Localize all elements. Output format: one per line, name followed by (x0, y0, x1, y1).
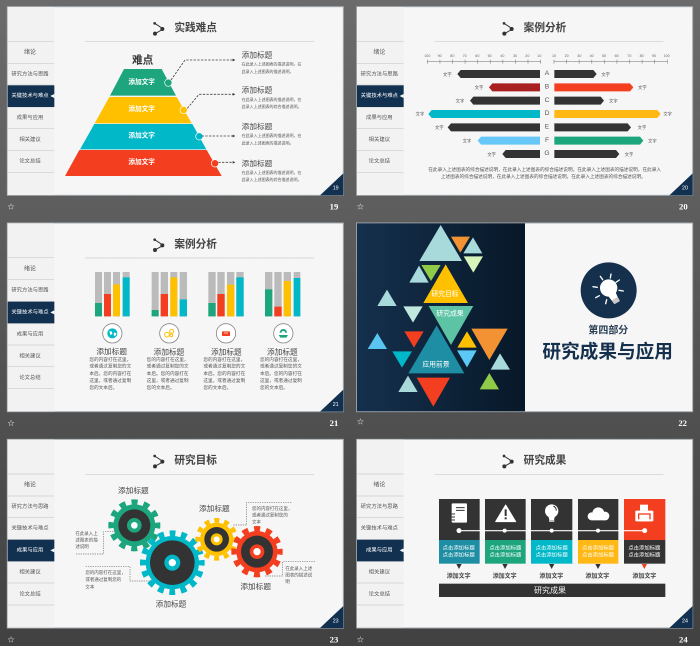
pyramid descriptions: 添加标题 (242, 49, 273, 59)
page number 22: 22 (678, 418, 687, 428)
icon: light bulb (581, 262, 637, 318)
pyramid descriptions: 在此录入上述图表的描述说明，在 (242, 169, 301, 175)
gear captions: 文本 (252, 518, 261, 525)
triangle mosaic: 研究目标 (431, 289, 459, 298)
slide 19: difficulties pyramid (7, 7, 343, 213)
slide frame and navigation 23: 论文总结 (19, 589, 41, 597)
slide frame and navigation 21: 论文总结 (19, 373, 41, 381)
results columns: 点击添加标题 (443, 550, 475, 558)
section title: 研究成果与应用 (542, 341, 673, 362)
chart description: 在此录入上述图表的综合描述说明，在此录入上述图表的综合描述说明。在此录入上述图表的描述说明，在此录入 (428, 166, 661, 173)
gear captions: 明 (285, 579, 290, 585)
slide frame and navigation 19: 绪论 (24, 48, 36, 56)
triangle mosaic: 应用前景 (422, 359, 450, 368)
slide frame and navigation 19: 关键技术与难点 (11, 91, 49, 99)
slide frame and navigation 24: 论文总结 (369, 589, 391, 597)
gear captions: 述说明 (75, 543, 89, 550)
slide frame and navigation 23: 研究目标 (174, 454, 217, 467)
pyramid chart: 添加文字 (128, 77, 155, 86)
butterfly bars: 文字 (638, 84, 647, 91)
gear captions: 在此录入上述 (285, 565, 313, 572)
gear captions: 添加标题 (240, 581, 271, 591)
slide frame and navigation 24: 24 (682, 618, 688, 624)
slide frame and navigation 24: 研究方法与思路 (361, 502, 399, 510)
gear captions: 在此录入上 (75, 530, 98, 537)
column captions: 您的内容打在这里， (89, 356, 131, 363)
slide 22: section divider (356, 223, 693, 428)
pyramid descriptions: 在此录入上述图表的描述说明，在 (242, 96, 301, 102)
axis scales: 40 (590, 54, 594, 58)
column captions: 您的文本后。 (89, 384, 117, 391)
butterfly bars (416, 70, 673, 158)
column captions: 这里，或者通过复制 (89, 377, 132, 384)
results columns (439, 499, 665, 580)
pyramid descriptions: 此录入上述图表的综合描述说明。 (242, 103, 301, 109)
axis scales: 20 (565, 54, 569, 58)
gear captions: 您的内容打在这里， (252, 505, 292, 512)
slide frame and navigation 21: 相关建议 (19, 351, 41, 359)
slide frame and navigation 19: 研究方法与思路 (11, 69, 49, 77)
timeline (456, 528, 647, 533)
butterfly bars: E (545, 123, 550, 130)
gear captions: 或者通过复制您的 (252, 511, 288, 518)
gear captions: 或者通过复制您的 (85, 576, 122, 583)
pyramid chart: 添加文字 (128, 104, 155, 113)
slide frame and navigation 19: 论文总结 (19, 157, 41, 165)
column captions: 或者通过复制您的文 (260, 362, 302, 369)
triangle mosaic: 研究成果 (436, 308, 464, 317)
results columns: 点击添加标题 (536, 543, 568, 551)
slide frame and navigation 19: 19 (333, 186, 339, 192)
axis scales: 90 (438, 54, 442, 58)
column captions: 添加标题 (154, 346, 185, 356)
gear diagram (111, 502, 280, 592)
slide frame and navigation 21: 绪论 (24, 264, 36, 272)
chart description: 上述图表的综合描述说明，在此录入上述图表的综合描述说明，在此录入上述图表的综合描述说明。 (441, 173, 646, 180)
results bar (439, 584, 665, 597)
slide frame and navigation 21: 21 (330, 418, 338, 428)
axis scales: 90 (652, 54, 656, 58)
pyramid chart: 难点 (132, 53, 154, 66)
slide frame and navigation 20: 关键技术与难点 (361, 91, 399, 99)
slide frame and navigation 21: 关键技术与难点 (11, 307, 49, 315)
butterfly bars: 文字 (443, 71, 452, 78)
slide frame and navigation 19 (7, 7, 343, 213)
icon: warning (496, 505, 516, 522)
butterfly bars: 文字 (435, 124, 444, 131)
slide frame and navigation 23: 关键技术与难点 (11, 524, 49, 532)
axis scales: 70 (627, 54, 631, 58)
column captions: 这里，或者通过复制 (203, 377, 246, 384)
slide frame and navigation 23: 成果与应用 (17, 546, 43, 554)
slide frame and navigation 24: 研究成果 (524, 454, 567, 467)
column captions: 本后。您的内容打在 (89, 370, 132, 377)
gear captions: 添加标题 (156, 598, 187, 608)
results columns: 添加文字 (447, 572, 471, 580)
results columns: 点击添加标题 (582, 550, 615, 558)
bar charts (95, 272, 300, 316)
slide frame and navigation 20 (356, 7, 693, 213)
column captions: 或者通过复制您的文 (147, 362, 189, 369)
slide frame and navigation 23 (7, 439, 343, 645)
results columns: 点击添加标题 (628, 543, 661, 551)
pyramid descriptions: 在此录入上述图表的描述说明，在 (242, 132, 301, 138)
slide frame and navigation 20: 20 (682, 186, 688, 192)
slide 24: research results (356, 439, 693, 645)
axis scales: 100 (424, 54, 430, 58)
column captions: 您的内容打在这里， (147, 356, 189, 363)
column captions: 添加标题 (96, 346, 127, 356)
column captions: 本后。您的内容打在 (203, 370, 246, 377)
butterfly bars: G (544, 150, 550, 157)
pyramid descriptions: 此录入上述图表的描述说明。 (242, 68, 293, 74)
slide frame and navigation 24: 绪论 (373, 481, 385, 489)
axis scales: 70 (463, 54, 467, 58)
butterfly bars: B (545, 83, 550, 90)
axis scales: 10 (552, 54, 556, 58)
butterfly bars: 文字 (648, 137, 657, 144)
slide frame and navigation 24: ☆ (356, 635, 364, 645)
butterfly bars: 文字 (456, 97, 465, 104)
butterfly bars: A (545, 70, 550, 77)
pyramid chart: 添加文字 (128, 130, 155, 139)
butterfly bars: 文字 (487, 151, 497, 158)
pyramid chart (65, 53, 235, 176)
axis scales: 50 (602, 54, 606, 58)
slide frame and navigation 21 (7, 223, 343, 429)
axis scales: 40 (500, 54, 504, 58)
pyramid chart: 添加文字 (128, 157, 155, 166)
results columns: 点击添加标题 (628, 550, 661, 558)
slide frame and navigation 24: 关键技术与难点 (361, 524, 399, 532)
column captions: 或者通过复制您的文 (89, 362, 132, 369)
chart description (428, 166, 661, 180)
axis scales: 60 (615, 54, 619, 58)
pyramid descriptions (242, 49, 301, 182)
slide frame and navigation 19: ☆ (7, 203, 15, 213)
results columns: 点击添加标题 (536, 550, 568, 558)
column captions: 您的内容打在这里， (203, 356, 245, 363)
axis scales: 30 (577, 54, 581, 58)
slide frame and navigation 24: 24 (679, 634, 688, 644)
results bar: 研究成果 (534, 585, 566, 595)
axis scales: 100 (664, 54, 670, 58)
column captions: 您的文本后。 (260, 384, 288, 391)
axis scales: 10 (537, 54, 541, 58)
section title (542, 323, 673, 362)
slide frame and navigation 20: 案例分析 (524, 21, 567, 34)
slide frame and navigation 19: 相关建议 (19, 135, 41, 143)
gear captions: 图表的描述说 (285, 571, 313, 578)
slide frame and navigation 20: 相关建议 (369, 135, 391, 143)
icon: printer (635, 505, 653, 521)
slide frame and navigation 21: 21 (333, 402, 339, 408)
page number 22: ☆ (356, 418, 364, 428)
pyramid descriptions: 添加标题 (242, 121, 273, 131)
slide frame and navigation 23: ☆ (7, 635, 15, 645)
butterfly bars: 文字 (625, 151, 634, 158)
icon: cloud (588, 507, 609, 520)
slide frame and navigation 23: 绪论 (24, 481, 36, 489)
pyramid descriptions: 添加标题 (242, 84, 273, 94)
slide frame and navigation 23: 研究方法与思路 (11, 502, 49, 510)
slide frame and navigation 20: 成果与应用 (366, 113, 393, 121)
gear captions (75, 485, 315, 608)
section title: 第四部分 (588, 323, 628, 336)
column captions: 这里，或者通过复制 (260, 377, 302, 384)
slide frame and navigation 24: 相关建议 (369, 568, 391, 576)
axis scales: 80 (450, 54, 454, 58)
column captions: 本后。您的内容打在 (147, 370, 189, 377)
slide frame and navigation 19: 实践难点 (174, 21, 217, 34)
gear: cyan (143, 533, 202, 592)
results columns: 添加文字 (632, 572, 656, 580)
gear captions: 添加标题 (199, 503, 230, 513)
results columns: 点击添加标题 (489, 550, 522, 558)
page number 22 (356, 418, 687, 428)
slide frame and navigation 20: 研究方法与思路 (361, 69, 399, 77)
butterfly bars: 文字 (663, 110, 673, 117)
column captions: 您的内容打在这里， (260, 356, 302, 363)
column captions: 添加标题 (267, 346, 298, 356)
results columns: 添加文字 (493, 572, 517, 580)
slide frame and navigation 20: 绪论 (373, 48, 385, 56)
pyramid descriptions: 在此录入上述图表的描述说明，在 (242, 60, 301, 66)
axis scales: 30 (513, 54, 517, 58)
slide frame and navigation 21: 案例分析 (174, 237, 217, 250)
gear captions: 添加标题 (118, 485, 149, 495)
slide frame and navigation 23: 相关建议 (19, 568, 41, 576)
axis scales: 60 (475, 54, 479, 58)
round icons (103, 324, 293, 343)
pyramid descriptions: 此录入上述图表的综合描述说明。 (242, 176, 301, 182)
slide frame and navigation 24: 成果与应用 (366, 546, 393, 554)
icon: notebook (452, 503, 467, 523)
axis scales (424, 54, 670, 64)
results columns: 点击添加标题 (582, 543, 615, 551)
gear: red (234, 529, 280, 575)
slide background (357, 223, 693, 412)
axis scales: 20 (525, 54, 529, 58)
axis scales: 80 (640, 54, 644, 58)
column captions (89, 346, 302, 391)
triangle mosaic (368, 225, 510, 407)
butterfly bars: F (545, 137, 549, 144)
column captions: 添加标题 (211, 346, 242, 356)
results columns: 添加文字 (539, 572, 563, 580)
column captions: 这里，或者通过复制 (147, 377, 189, 384)
slide 21: four bar groups (7, 223, 343, 429)
butterfly bars: 文字 (475, 84, 484, 91)
pyramid descriptions: 此录入上述图表的描述说明。 (242, 139, 293, 145)
pyramid descriptions: 添加标题 (242, 158, 273, 168)
results columns: 添加文字 (585, 572, 609, 580)
slide frame and navigation 20: ☆ (356, 203, 364, 213)
column captions: 本后。您的内容打在 (260, 370, 302, 377)
icons (452, 503, 653, 523)
butterfly bars: C (545, 97, 550, 104)
column captions: 或者通过复制您的文 (203, 362, 246, 369)
icon: bulb (545, 504, 558, 522)
butterfly bars: D (545, 110, 550, 117)
slide frame and navigation 19: 成果与应用 (17, 113, 43, 121)
slide frame and navigation 21: ☆ (7, 419, 15, 429)
results columns: 点击添加标题 (443, 543, 475, 551)
gear captions: 述图表的描 (75, 536, 98, 543)
slide frame and navigation 19: 19 (330, 202, 339, 212)
gear: green (111, 502, 158, 549)
butterfly bars: 文字 (416, 110, 425, 117)
slide frame and navigation 20: 论文总结 (369, 157, 391, 165)
slide frame and navigation 23: 23 (333, 618, 339, 624)
butterfly bars: 文字 (463, 137, 472, 144)
slide frame and navigation 21: 研究方法与思路 (11, 286, 49, 294)
axis scales: 50 (488, 54, 492, 58)
slide frame and navigation 23: 23 (330, 634, 339, 644)
column captions: 您的文本后。 (203, 384, 231, 391)
butterfly bars: 文字 (601, 71, 611, 78)
gear captions: 您的内容打在这里， (85, 569, 126, 576)
column captions: 您的文本后。 (147, 384, 175, 391)
butterfly bars: 文字 (638, 124, 647, 131)
slide frame and navigation 24 (356, 439, 693, 645)
slide frame and navigation 21: 成果与应用 (17, 329, 43, 337)
gear: yellow (198, 520, 236, 558)
slide frame and navigation 20: 20 (679, 202, 688, 212)
slide 23: gears (7, 439, 343, 645)
butterfly bars: 文字 (609, 97, 618, 104)
slide 20: butterfly bar chart (356, 7, 693, 213)
results columns: 点击添加标题 (489, 543, 522, 551)
gear captions: 文本 (85, 583, 95, 590)
